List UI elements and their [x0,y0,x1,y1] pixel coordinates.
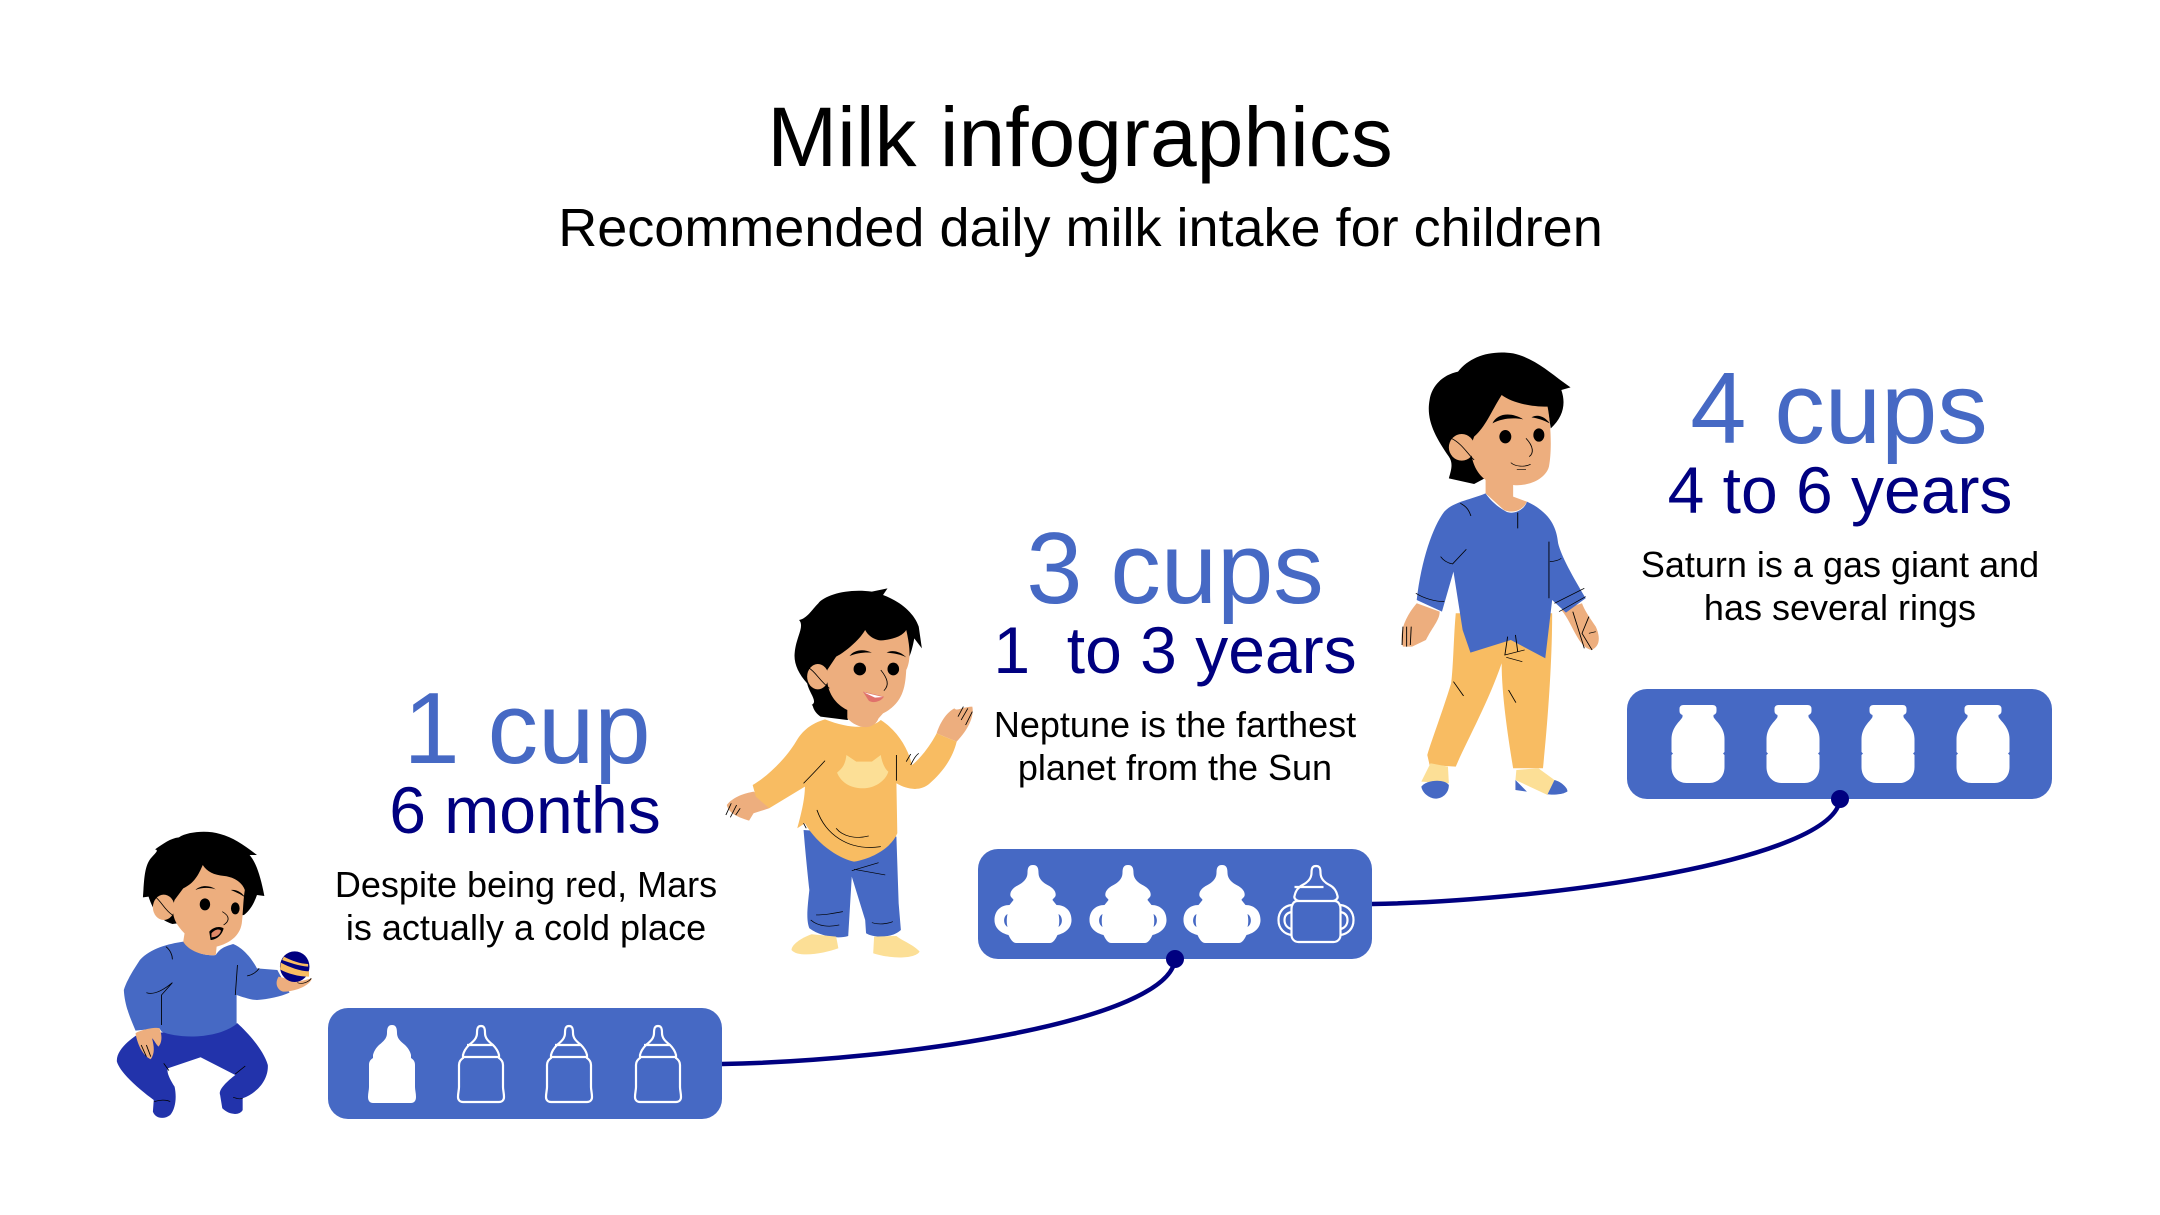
illustration: toddler in yellow shirt [726,588,973,957]
illustration: seated baby with ball [117,832,312,1118]
icon: milk jar [1766,705,1820,783]
title: Milk infographics [767,90,1393,184]
heading: 3 cups: 3 cups [1026,513,1324,625]
description: Neptune: Neptune is the farthest [994,704,1356,745]
bottle tray [328,1008,722,1119]
icon: filled sippy bottle [1184,865,1260,943]
description: Mars: Despite being red, Mars [335,864,717,905]
heading: 1 cup: 1 cup [403,673,651,785]
age: 4 to 6 years: 4 to 6 years [1668,453,2012,527]
description: Mars: is actually a cold place [346,907,706,948]
connector: first panel to second panel [722,959,1175,1064]
description: Neptune: planet from the Sun [1018,747,1332,788]
icon: empty baby bottle [546,1026,592,1102]
panel: 6 months [328,673,722,1119]
icon: milk jar [1862,705,1914,783]
age: 6 months: 6 months [389,773,661,847]
subtitle: Recommended daily milk intake for children [558,198,1603,258]
description: Saturn: has several rings [1704,587,1976,628]
heading: 4 cups: 4 cups [1690,353,1988,465]
connector: second panel to third panel [1372,799,1840,904]
icon: empty baby bottle [635,1026,681,1102]
connector dot: second panel [1166,950,1184,968]
connector dot: third panel [1831,790,1849,808]
milk jar tray [1627,689,2052,799]
icon: empty baby bottle [458,1026,504,1102]
icon: milk jar [1672,705,1724,783]
icon: filled sippy bottle [994,865,1072,943]
panel: 4 to 6 years [1627,353,2052,799]
sippy cup tray [978,849,1372,959]
icon: empty sippy bottle [1278,866,1354,942]
description: Saturn: Saturn is a gas giant and [1641,544,2039,585]
panel: 1 to 3 years [978,513,1372,959]
icon: milk jar [1956,705,2010,783]
icon: filled sippy bottle [1090,865,1166,943]
illustration: child in blue shirt [1402,352,1599,799]
age: 1 to 3 years: 1 to 3 years [993,613,1357,687]
icon: filled baby bottle [368,1025,416,1103]
